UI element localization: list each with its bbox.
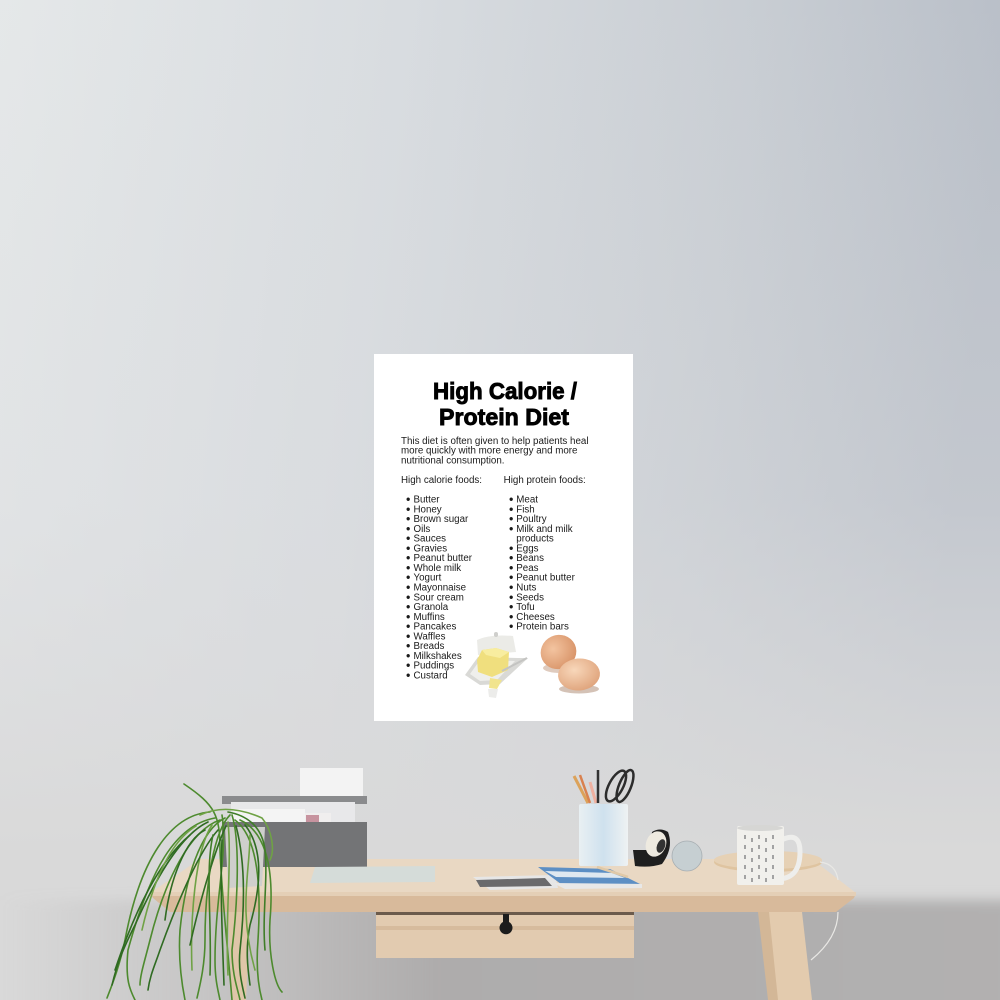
magazine on desk [310, 866, 435, 883]
intro paragraph: more quickly with more energy and more [401, 446, 578, 457]
high calorie foods list: • [406, 522, 410, 536]
intro paragraph [401, 436, 588, 466]
glass sphere [672, 841, 702, 871]
icon: eggs [535, 629, 601, 694]
tape dispenser [633, 828, 670, 867]
drawer keyhole [500, 914, 513, 934]
high protein foods list: Peanut butter [516, 573, 576, 584]
poster title: Protein Diet [439, 404, 569, 430]
high protein foods list: Protein bars [516, 622, 569, 633]
high calorie foods list: • [406, 649, 410, 663]
high calorie foods list: Breads [414, 641, 445, 652]
high protein foods list: • [509, 600, 513, 614]
mug [737, 825, 800, 885]
high calorie foods list: Pancakes [414, 622, 456, 633]
pen cup with pencils and scissors [574, 768, 637, 866]
high calorie foods list: Puddings [414, 661, 454, 672]
desk drawer [376, 915, 634, 958]
high protein foods list: • [509, 571, 513, 585]
high calorie foods list: • [406, 512, 410, 526]
desk legs [758, 912, 779, 1000]
high calorie foods list: • [406, 492, 410, 506]
high calorie foods list: • [406, 532, 410, 546]
plant [107, 784, 282, 1000]
high protein foods list [504, 475, 586, 634]
high protein foods list: • [509, 541, 513, 555]
high protein foods list: Tofu [516, 602, 535, 613]
high calorie foods list: • [406, 620, 410, 634]
high calorie foods list: Butter [414, 494, 440, 506]
high calorie foods list: • [406, 571, 410, 585]
high protein foods list: • [509, 502, 513, 516]
high protein foods list: Poultry [516, 514, 547, 525]
high calorie foods list: Gravies [414, 543, 447, 554]
high protein foods list: • [509, 551, 513, 565]
high protein foods list: • [509, 580, 513, 594]
high calorie foods list: • [406, 541, 410, 555]
poster [374, 354, 633, 721]
high calorie foods list: • [406, 580, 410, 594]
high protein foods list: • [509, 561, 513, 575]
high calorie foods list: Honey [414, 504, 442, 515]
high protein foods list: Peas [516, 563, 539, 574]
high protein foods list: Eggs [516, 543, 539, 554]
high calorie foods list: Peanut butter [414, 553, 473, 564]
high calorie foods list: Custard [414, 670, 448, 682]
open notebook [473, 867, 642, 890]
high calorie foods list: Sour cream [414, 592, 464, 603]
poster title: High Calorie / [433, 378, 577, 404]
high calorie foods list: • [406, 561, 410, 575]
high protein foods list: • [509, 512, 513, 526]
high calorie foods list: Sauces [414, 534, 446, 545]
high calorie foods list: Milkshakes [414, 651, 462, 662]
high protein foods list: Nuts [516, 582, 536, 594]
high protein foods list: Fish [516, 504, 535, 515]
high calorie foods list: Brown sugar [414, 514, 469, 525]
high calorie foods list: • [406, 629, 410, 643]
high calorie foods list: High calorie foods: [401, 475, 482, 486]
wireless charger [714, 851, 822, 872]
high calorie foods list: Mayonnaise [414, 582, 466, 594]
poster title [433, 378, 577, 430]
high calorie foods list: • [406, 610, 410, 624]
high protein foods list: Seeds [516, 592, 544, 603]
plant pot [225, 827, 265, 888]
shadow below desk [0, 900, 1000, 1000]
icon: butter dish [465, 632, 528, 698]
high protein foods list: • [509, 610, 513, 624]
high calorie foods list: • [406, 639, 410, 653]
high protein foods list: • [509, 492, 513, 506]
high protein foods list: Beans [516, 553, 544, 564]
desk [150, 859, 856, 1000]
high calorie foods list: • [406, 551, 410, 565]
high calorie foods list: Granola [414, 602, 449, 613]
high protein foods list: • [509, 620, 513, 634]
high protein foods list: Cheeses [516, 612, 555, 623]
high protein foods list: • [509, 522, 513, 536]
high calorie foods list [401, 475, 482, 682]
high calorie foods list: • [406, 600, 410, 614]
high calorie foods list: • [406, 668, 410, 682]
high calorie foods list: Oils [414, 524, 430, 535]
high protein foods list: • [509, 590, 513, 604]
high calorie foods list: Muffins [414, 612, 445, 623]
desk top [150, 859, 856, 893]
high calorie foods list: • [406, 590, 410, 604]
high protein foods list: High protein foods: [504, 475, 586, 486]
intro paragraph: This diet is often given to help patients heal [401, 436, 588, 447]
charging cable [811, 862, 838, 960]
high calorie foods list: Waffles [414, 631, 446, 642]
high calorie foods list: • [406, 659, 410, 673]
high calorie foods list: • [406, 502, 410, 516]
high calorie foods list: Yogurt [414, 573, 442, 584]
intro paragraph: nutritional consumption. [401, 456, 504, 466]
letter organizer [222, 768, 367, 867]
high calorie foods list: Whole milk [414, 563, 461, 574]
high protein foods list: products [516, 534, 554, 545]
high protein foods list: Milk and milk [516, 524, 573, 535]
high protein foods list: Meat [516, 494, 538, 506]
